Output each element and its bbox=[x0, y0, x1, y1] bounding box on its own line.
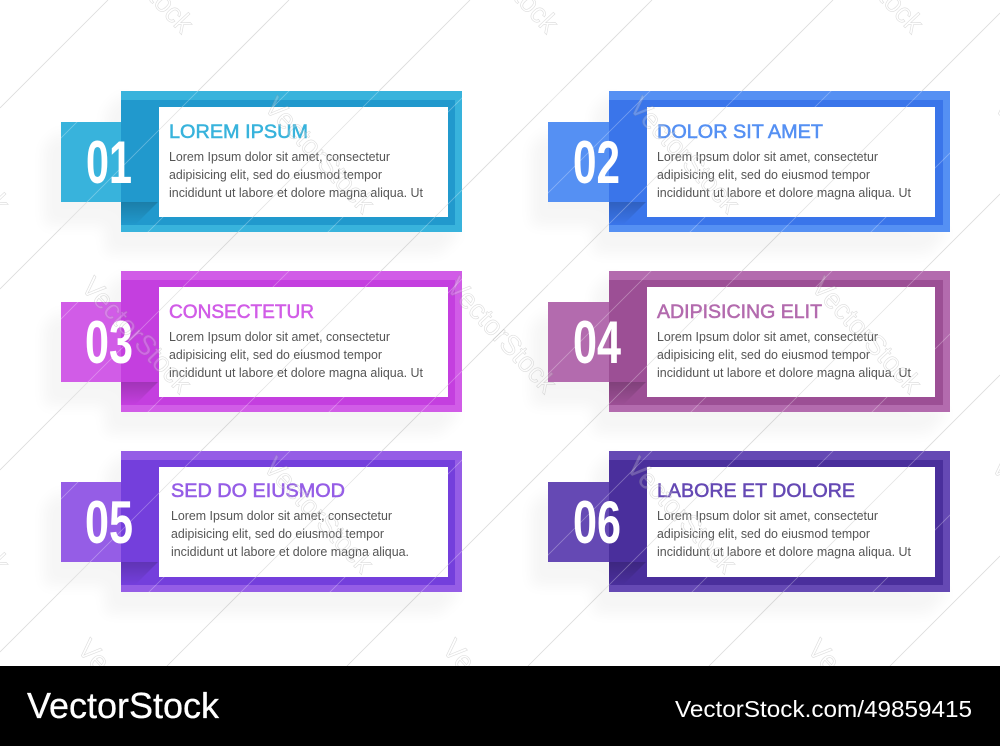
watermark text: VectorStock bbox=[76, 271, 199, 400]
body text: card 04: incididunt ut labore et dolore magna aliqua. Ut bbox=[657, 365, 911, 380]
body text: card 03: adipisicing elit, sed do eiusmod tempor bbox=[169, 347, 383, 362]
watermark text: VectorStock bbox=[806, 271, 929, 400]
headings: DOLOR SIT AMET bbox=[657, 121, 823, 143]
watermark text: VectorStock bbox=[259, 91, 382, 220]
body text: card 04: Lorem Ipsum dolor sit amet, consectetur bbox=[657, 329, 879, 344]
watermark text: VectorStock bbox=[621, 451, 744, 580]
headings: LABORE ET DOLORE bbox=[657, 480, 855, 502]
panel: card 03 bbox=[61, 271, 462, 412]
body text: card 01 bbox=[169, 149, 423, 200]
body text: card 06 bbox=[657, 508, 911, 559]
footer image id: VectorStock.com/49859415 bbox=[675, 696, 972, 722]
headings: SED DO EIUSMOD bbox=[171, 480, 345, 502]
number badges bbox=[85, 129, 621, 556]
panel: card 05 bbox=[61, 451, 462, 592]
body text: card 06: Lorem Ipsum dolor sit amet, consectetur bbox=[657, 508, 879, 523]
body text: card 05: Lorem Ipsum dolor sit amet, consectetur bbox=[171, 508, 393, 523]
headings: LOREM IPSUM bbox=[169, 121, 308, 143]
body text: card 04 bbox=[657, 329, 911, 380]
body text: card 02 bbox=[657, 149, 911, 200]
number badges: 03 bbox=[85, 309, 133, 376]
headings: ADIPISICING ELIT bbox=[657, 301, 822, 323]
watermark text: VectorStock bbox=[441, 271, 564, 400]
number badges: 01 bbox=[86, 129, 132, 196]
watermark lines over coloured bands bbox=[61, 91, 950, 592]
body text: card 01: incididunt ut labore et dolore magna aliqua. Ut bbox=[169, 185, 423, 200]
footer logo text: VectorStock bbox=[27, 685, 220, 726]
body text: card 06: incididunt ut labore et dolore magna aliqua. Ut bbox=[657, 544, 911, 559]
headings: CONSECTETUR bbox=[169, 301, 314, 323]
body text: card 02: Lorem Ipsum dolor sit amet, consectetur bbox=[657, 149, 879, 164]
body text: card 03: Lorem Ipsum dolor sit amet, consectetur bbox=[169, 329, 391, 344]
number badges: 06 bbox=[573, 489, 621, 556]
body text: card 06: adipisicing elit, sed do eiusmod tempor bbox=[657, 526, 871, 541]
body text: card 04: adipisicing elit, sed do eiusmod tempor bbox=[657, 347, 871, 362]
watermark lines over text boxes bbox=[159, 107, 908, 577]
number badges: 04 bbox=[573, 309, 621, 376]
body text: card 03: incididunt ut labore et dolore magna aliqua. Ut bbox=[169, 365, 423, 380]
body text: card 05 bbox=[171, 508, 409, 559]
panel: card 02 bbox=[548, 91, 950, 232]
panel: card 01 bbox=[61, 91, 462, 232]
number badges: 05 bbox=[85, 489, 133, 556]
watermark text: VectorStock bbox=[258, 451, 381, 580]
card drop shadows bbox=[44, 95, 950, 614]
body text: card 01: adipisicing elit, sed do eiusmod tempor bbox=[169, 167, 383, 182]
body text: card 05: adipisicing elit, sed do eiusmod tempor bbox=[171, 526, 385, 541]
body text: card 05: incididunt ut labore et dolore magna aliqua. bbox=[171, 544, 409, 559]
body text: card 02: adipisicing elit, sed do eiusmod tempor bbox=[657, 167, 871, 182]
body text: card 02: incididunt ut labore et dolore magna aliqua. Ut bbox=[657, 185, 911, 200]
watermark text: VectorStock bbox=[624, 91, 747, 220]
panel: card 04 bbox=[548, 271, 950, 412]
panel: card 06 bbox=[548, 451, 950, 592]
footer bar bbox=[0, 666, 1000, 746]
body text: card 01: Lorem Ipsum dolor sit amet, consectetur bbox=[169, 149, 391, 164]
body text: card 03 bbox=[169, 329, 423, 380]
number badges: 02 bbox=[573, 129, 620, 196]
headings bbox=[169, 121, 855, 502]
